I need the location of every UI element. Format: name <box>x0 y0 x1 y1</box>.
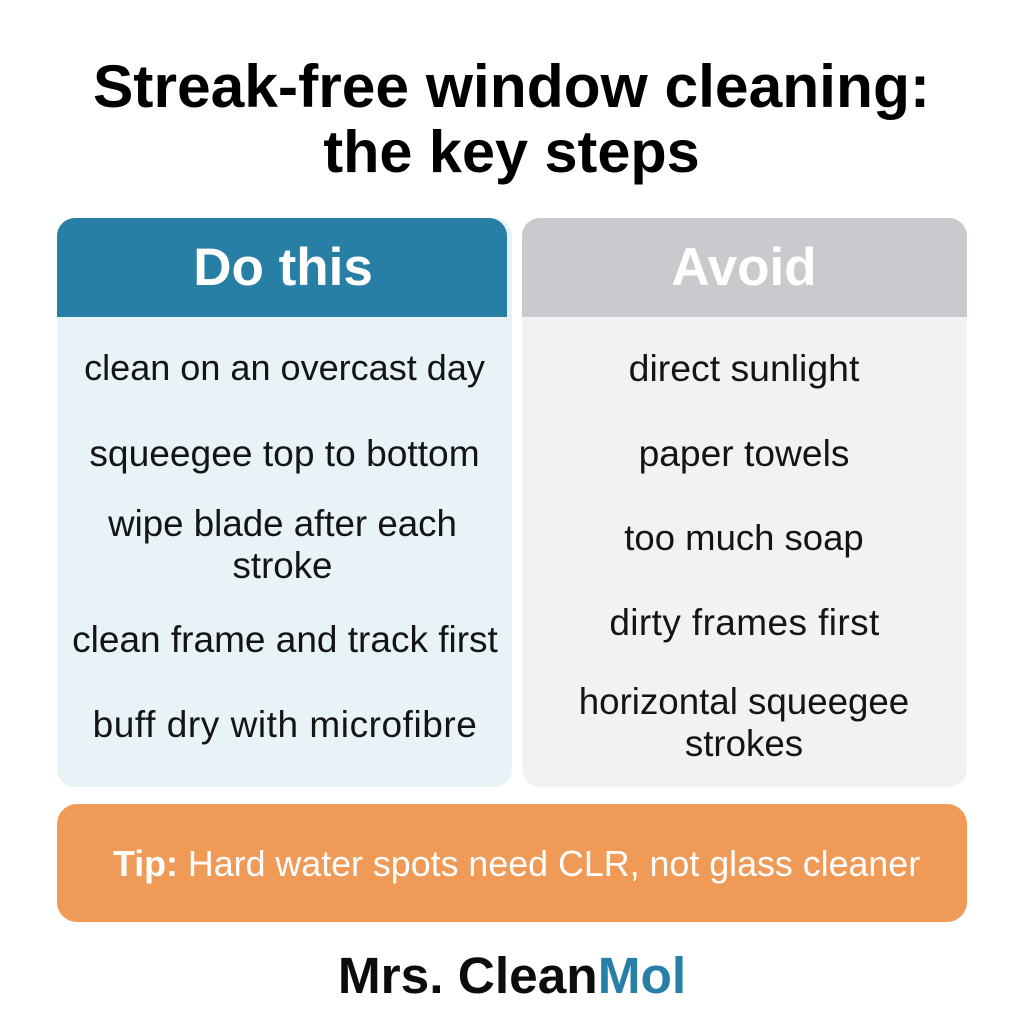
item: dirty frames first <box>609 602 880 643</box>
tip banner <box>57 804 967 922</box>
brand logo: Mrs. CleanMol <box>338 946 686 1004</box>
item <box>579 681 909 764</box>
panel: do this <box>57 218 512 787</box>
item: wipe blade after each <box>108 503 457 544</box>
item: strokes <box>685 723 803 764</box>
item <box>108 503 457 586</box>
item: too much soap <box>624 517 864 558</box>
panel body: do this <box>57 218 512 787</box>
panel: avoid <box>522 218 967 787</box>
heading: avoid: Avoid <box>671 238 817 297</box>
item: stroke <box>233 545 332 586</box>
item: paper towels <box>639 432 849 474</box>
item: squeegee top to bottom <box>89 432 480 474</box>
item: horizontal squeegee <box>579 681 909 722</box>
item: clean frame and track first <box>72 619 498 660</box>
panel body: avoid <box>522 218 967 787</box>
panel header: avoid <box>522 218 967 317</box>
item: buff dry with microfibre <box>93 704 477 745</box>
title: Streak-free window cleaning: <box>93 52 930 120</box>
title <box>93 52 930 185</box>
item: clean on an overcast day <box>84 347 485 388</box>
tip text: Tip: Hard water spots need CLR, not glass cleaner <box>113 844 920 884</box>
item: direct sunlight <box>629 347 859 389</box>
panel header: do this <box>57 218 507 317</box>
title: the key steps <box>323 118 700 185</box>
heading: do this: Do this <box>193 238 373 297</box>
